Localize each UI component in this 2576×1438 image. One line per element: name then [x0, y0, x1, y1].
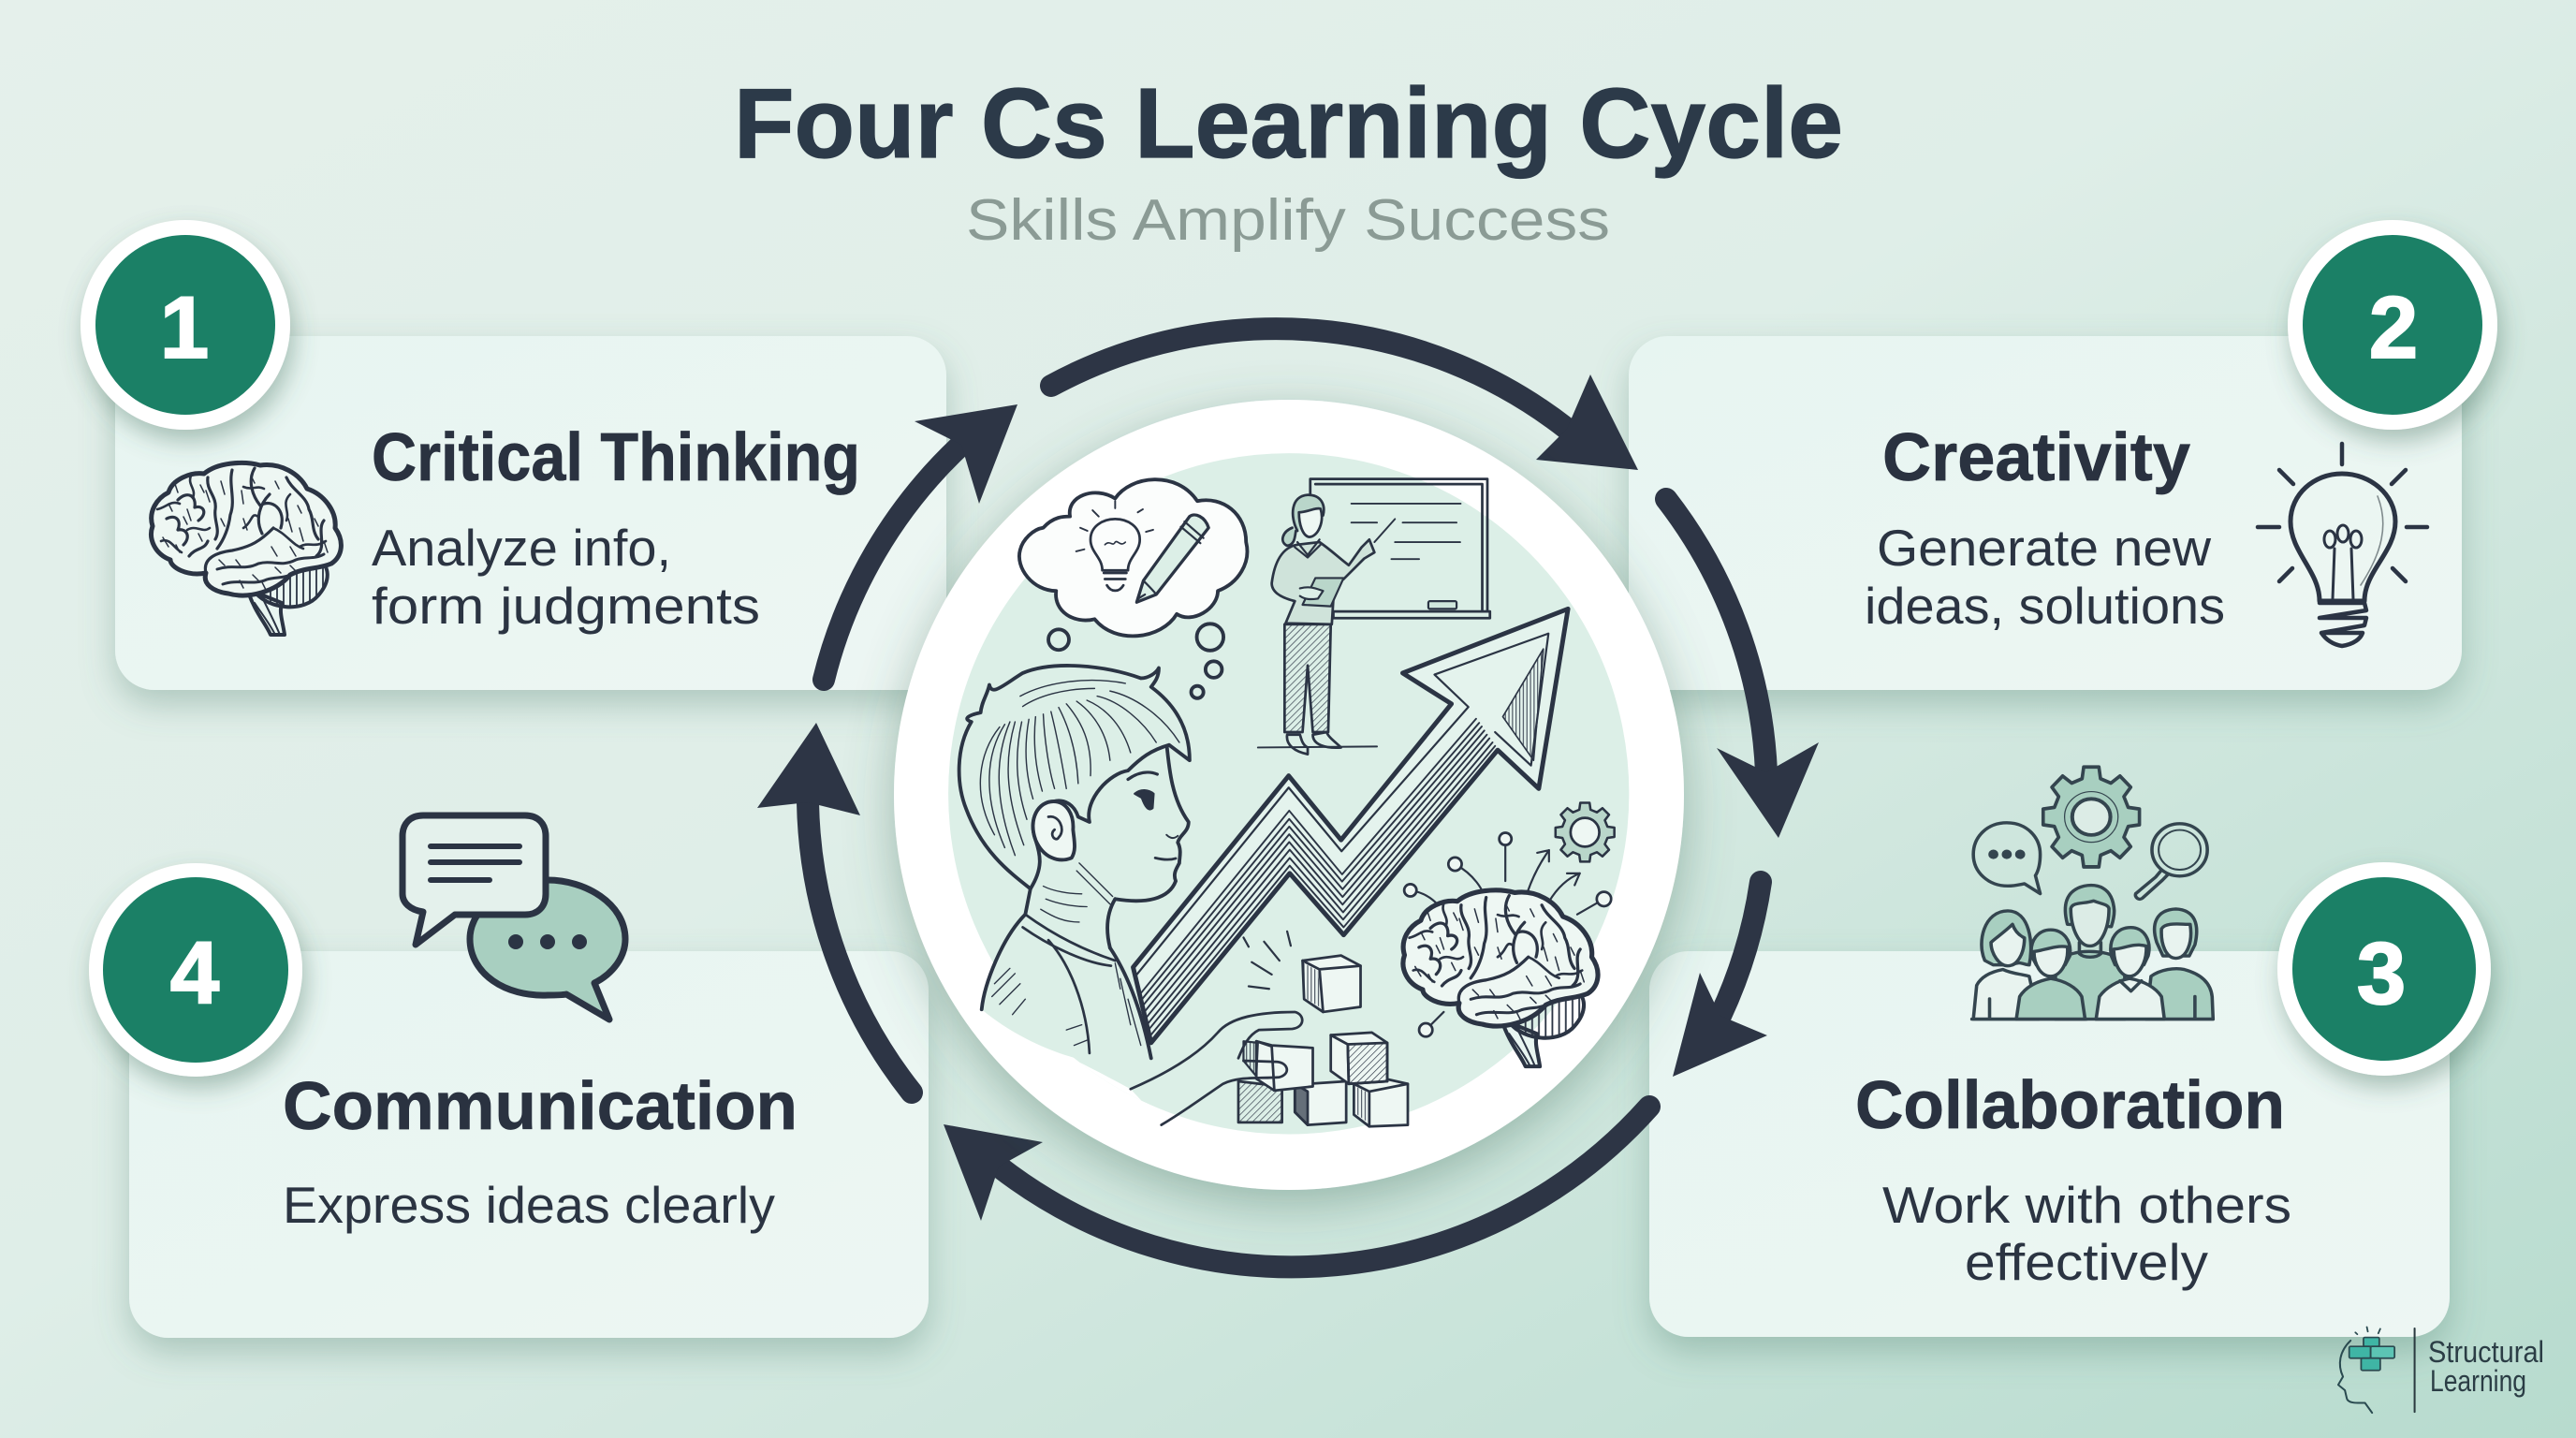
building blocks and hand: [1131, 932, 1408, 1126]
heading: collaboration: Collaboration: [1855, 1068, 2285, 1143]
description: communication: Express ideas clearly: [283, 1176, 776, 1234]
description: critical thinking: Analyze info,: [372, 519, 671, 577]
heading: critical thinking: Critical Thinking: [372, 420, 860, 495]
badge 4: [89, 863, 302, 1077]
heading: communication: Communication: [283, 1069, 798, 1144]
arrow: critical thinking to creativity: [1051, 329, 1638, 470]
description: creativity: [1865, 519, 2225, 635]
icon: brain: [152, 462, 341, 635]
panel: creativity: [1629, 220, 2497, 690]
badge 2: [2288, 220, 2497, 430]
icon: light bulb: [2258, 444, 2427, 646]
description: collaboration: Work with others: [1882, 1176, 2291, 1234]
illustration artwork: [948, 453, 1629, 1135]
heading: creativity: Creativity: [1882, 420, 2190, 495]
arrow: communication back across bottom: [944, 1107, 1649, 1267]
arrow: bottom left up: [757, 723, 912, 1093]
growth arrow: [1134, 609, 1568, 1043]
subtitle: Skills Amplify Success: [966, 188, 1610, 253]
badge 1: [80, 220, 290, 430]
title: Four Cs Learning Cycle: [734, 68, 1843, 179]
icon: team with gear: [1972, 767, 2213, 1020]
badge 3: [2277, 862, 2491, 1076]
central illustration circle: [894, 400, 1684, 1215]
logo: structural learning: [2338, 1327, 2544, 1413]
arrow: collaboration to communication: [1673, 882, 1767, 1077]
thought cloud: [1019, 479, 1247, 698]
badge 1: 1: [160, 278, 209, 376]
boy profile: [959, 666, 1190, 1065]
arrow: creativity to collaboration: [1666, 499, 1819, 838]
description: collaboration: effectively: [1965, 1233, 2209, 1291]
badge 4: 4: [170, 923, 219, 1021]
panel: collaboration: [1649, 767, 2491, 1337]
logo wordmark: [2428, 1335, 2544, 1398]
description: critical thinking: [372, 519, 760, 635]
panel: critical thinking: [80, 220, 946, 690]
description: critical thinking: form judgments: [372, 577, 760, 635]
description: collaboration: [1882, 1176, 2291, 1291]
arrow: left up to top: [824, 404, 1017, 680]
panel: communication: [89, 815, 929, 1338]
cycle arrows: [757, 329, 1819, 1267]
teacher and board: [1258, 479, 1490, 755]
logo wordmark: Structural: [2428, 1335, 2544, 1369]
badge 3: 3: [2357, 924, 2406, 1022]
badge 2: 2: [2369, 278, 2418, 376]
description: creativity: ideas, solutions: [1865, 577, 2225, 635]
logo mark: [2338, 1327, 2415, 1413]
icon: speech bubbles: [402, 815, 625, 1020]
logo wordmark: Learning: [2430, 1364, 2526, 1398]
neural brain with gear: [1403, 803, 1615, 1066]
description: creativity: Generate new: [1877, 519, 2211, 577]
